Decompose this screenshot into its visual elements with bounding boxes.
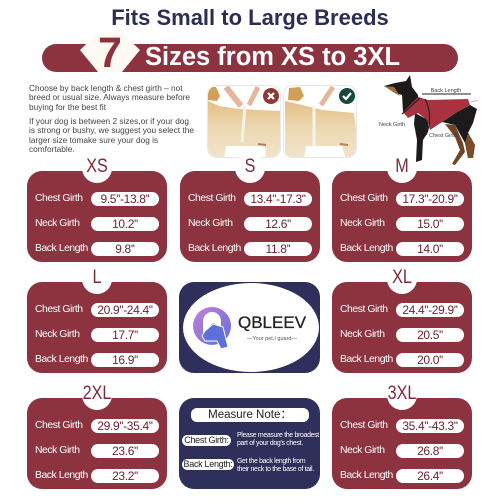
chest girth note: Please measure the broadest [237,432,319,439]
logo white ellipse [183,283,319,372]
card: S [180,171,320,262]
card: S: 12.6'' [265,217,291,231]
card: M: 14.0'' [417,242,443,256]
card: L: Chest Girth [35,304,83,315]
text: XS [86,156,108,177]
banner text: Sizes from XS to 3XL [145,43,400,71]
card: XL: 24.4''-29.9'' [402,303,458,317]
icon: brand dog logo [193,307,231,348]
illustration: dog wearing red vest with measurement labels: Chest Girth [429,133,457,139]
panel: brand logo [179,282,320,373]
text: 3XL [388,383,416,404]
chest girth label: Chest Girth: [184,435,229,445]
text: S [245,156,255,177]
card: XS: 9.8'' [115,242,135,256]
card: M: 15.0'' [417,217,443,231]
chest girth note [237,432,320,447]
card: XL: 20.0'' [417,353,443,367]
card: 3XL: 26.8'' [417,444,443,458]
card: XL: Back Length [340,354,393,365]
text: M [395,156,409,177]
brand tagline: —Your pet,I guard— [247,336,297,342]
title: Fits Small to Large Breeds [111,5,389,30]
chest girth note: part of your dog's chest. [237,440,303,447]
note heading: Measure Note： [208,409,292,421]
text block: sizing advice: is strong or bushy, we suggest you select the [29,125,194,135]
illustration: dog wearing red vest with measurement labels: Back Length [431,88,461,94]
back length note [237,458,314,473]
card: 2XL: 23.2'' [112,469,138,483]
card: L: Neck Girth [35,329,80,340]
card: L: 16.9'' [112,353,138,367]
back length label: Back Length: [184,459,232,469]
card: XS: Neck Girth [35,218,80,229]
card: L: 20.9''-24.4'' [97,303,153,317]
card: S: Neck Girth [188,218,233,229]
card: XS: 9.5''-13.8'' [100,192,150,206]
card: XS: Back Length [35,243,88,254]
card: 2XL [27,398,167,489]
card: XL [332,282,472,373]
text block: sizing advice: Choose by back length & chest girth – not [29,83,183,93]
text: L [92,267,101,288]
card: XL: Chest Girth [340,304,388,315]
illustration: dog wearing red vest with measurement labels: Neck Girth [379,122,405,128]
card: L: 17.7'' [112,328,138,342]
illustration: dog wearing red vest with measurement labels [379,75,478,165]
card: 3XL: Back Length [340,470,393,481]
card: 2XL: Neck Girth [35,445,80,456]
photo: wrong measuring [207,85,281,158]
text block: sizing advice: breed or usual size. Always measure before [29,92,190,102]
text: XL [392,267,412,288]
panel: measure note [179,398,320,489]
back length note: their neck to the base of tail. [237,466,314,473]
card: S: Chest Girth [188,193,236,204]
text block: sizing advice: comfortable. [29,144,75,154]
text block: sizing advice: buying for the best fit [29,102,106,112]
card: 2XL: 23.6'' [112,444,138,458]
card: L [27,282,167,373]
card: S: Back Length [188,243,241,254]
banner diamond [80,33,140,72]
card: 3XL [332,398,472,489]
note heading [191,408,309,422]
card: M: 17.3''-20.9'' [402,192,458,206]
card: 2XL: Chest Girth [35,420,83,431]
card: XL: 20.5'' [417,328,443,342]
card: M [332,171,472,262]
card: XL: Neck Girth [340,329,385,340]
banner: 7 sizes [42,44,458,72]
card: 2XL: Back Length [35,470,88,481]
card: S: 13.4''-17.3'' [250,192,306,206]
text block: sizing advice: larger size tomake sure your dog is [29,135,158,145]
brand name: QBLEEV [238,313,306,332]
card: S: 11.8'' [266,242,290,256]
card: 3XL: 35.4''-43.3'' [402,419,458,433]
card: 2XL: 29.9''-35.4'' [97,419,153,433]
card: L: Back Length [35,354,88,365]
text block: sizing advice: If your dog is between 2 sizes,or if your dog [29,116,189,126]
card: M: Neck Girth [340,218,385,229]
banner number 7: 7 [98,29,122,77]
card: 3XL: Neck Girth [340,445,385,456]
card: M: Back Length [340,243,393,254]
photo: correct measuring [283,85,357,158]
card: 3XL: Chest Girth [340,420,388,431]
text block: sizing advice [29,83,194,154]
back length note: Get the back length from [237,458,305,465]
card: XS [27,171,167,262]
text: 2XL [83,383,111,404]
card: M: Chest Girth [340,193,388,204]
card: 3XL: 26.4'' [417,469,443,483]
card: XS: Chest Girth [35,193,83,204]
card: XS: 10.2'' [112,217,138,231]
